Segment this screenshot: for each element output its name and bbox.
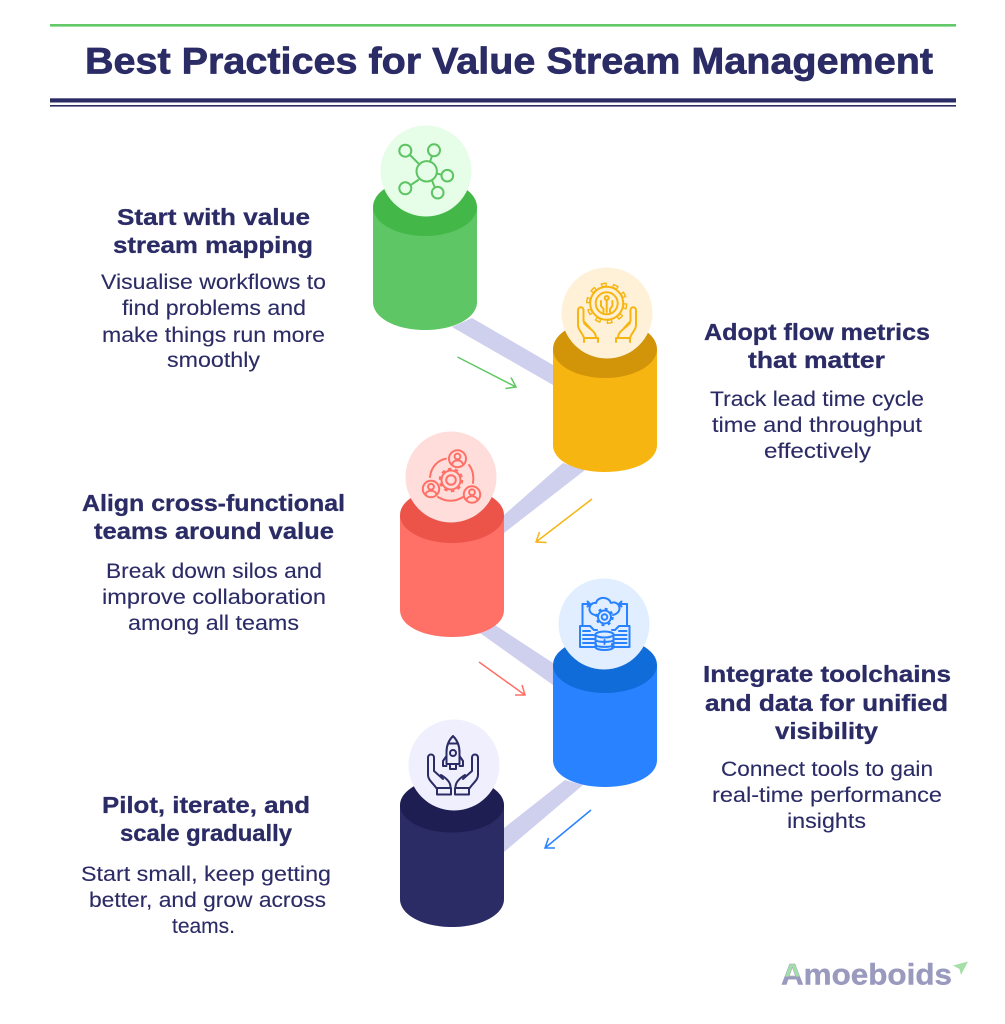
heading: integrate toolchains: Integrate toolchains: [703, 661, 951, 687]
heading: pilot iterate scale: scale gradually: [120, 820, 292, 846]
arrow: green: [458, 357, 516, 388]
heading: align cross-functional teams: [82, 490, 345, 544]
icon: cloud toolchain and data: [558, 578, 650, 670]
text block: integrate toolchains: [703, 661, 951, 833]
cylinder 5: navy: [400, 720, 504, 927]
text block: align cross-functional teams: [82, 490, 345, 635]
description: start with value stream mapping: make things run more: [102, 323, 325, 347]
heading: start with value stream mapping: Start with value: [117, 204, 310, 230]
description: start with value stream mapping: smoothly: [167, 348, 260, 372]
icon: team around gear: [406, 432, 496, 522]
description: integrate toolchains: real-time performance: [712, 783, 942, 807]
heading: align cross-functional teams: teams around value: [94, 518, 334, 544]
cylinder 1: green: [373, 126, 477, 330]
text block: adopt flow metrics: [704, 319, 930, 463]
connector: green to yellow: [452, 318, 553, 385]
arrow: blue: [545, 810, 591, 848]
icon: hands holding rocket: [408, 720, 500, 810]
heading: adopt flow metrics: that matter: [748, 347, 885, 373]
connector: yellow to red: [504, 463, 585, 533]
heading: integrate toolchains: visibility: [775, 718, 878, 744]
heading: integrate toolchains: and data for unified: [705, 690, 948, 716]
logo: Amoeboids: Amoeboids: [781, 958, 952, 992]
description: align cross-functional teams: Break down silos and: [106, 559, 322, 583]
description: integrate toolchains: insights: [787, 809, 866, 833]
heading: start with value stream mapping: [113, 204, 313, 258]
heading: align cross-functional teams: Align cross-functional: [82, 490, 345, 516]
description: integrate toolchains: [712, 757, 942, 833]
heading: start with value stream mapping: stream mapping: [113, 232, 313, 258]
description: pilot iterate scale: Start small, keep getting: [81, 862, 331, 886]
description: adopt flow metrics: [710, 387, 924, 463]
cylinder 4: blue: [553, 578, 657, 787]
description: align cross-functional teams: [102, 559, 326, 635]
description: pilot iterate scale: teams.: [172, 914, 235, 938]
description: start with value stream mapping: Visualise workflows to: [101, 270, 326, 294]
connector: red to blue: [480, 625, 553, 685]
icon: logo arrow: [953, 962, 968, 975]
heading: adopt flow metrics: Adopt flow metrics: [704, 319, 930, 345]
cylinder 2: yellow: [553, 268, 657, 472]
heading: adopt flow metrics: [704, 319, 930, 373]
description: start with value stream mapping: [101, 270, 326, 372]
arrow: red: [479, 662, 525, 695]
heading: pilot iterate scale: Pilot, iterate, and: [102, 792, 310, 818]
description: adopt flow metrics: Track lead time cycle: [710, 387, 924, 411]
icon: network map: [380, 126, 472, 216]
text block: pilot iterate scale: [81, 792, 331, 938]
title: Best Practices for Value Stream Management: [85, 40, 933, 82]
description: align cross-functional teams: among all teams: [128, 611, 299, 635]
heading: pilot iterate scale: [102, 792, 310, 846]
description: integrate toolchains: Connect tools to gain: [721, 757, 933, 781]
description: adopt flow metrics: effectively: [764, 439, 871, 463]
text block: start with value stream mapping: [101, 204, 326, 372]
cylinder 3: red: [400, 432, 504, 637]
description: align cross-functional teams: improve collaboration: [102, 585, 326, 609]
description: pilot iterate scale: [81, 862, 331, 938]
heading: integrate toolchains: [703, 661, 951, 744]
connector: blue to navy: [504, 780, 583, 852]
title double underline: [50, 98, 956, 107]
description: pilot iterate scale: better, and grow across: [89, 888, 326, 912]
description: start with value stream mapping: find problems and: [122, 296, 306, 320]
description: adopt flow metrics: time and throughput: [712, 413, 922, 437]
top green rule: [50, 24, 956, 27]
arrow: yellow: [536, 499, 592, 542]
icon: hands holding gear: [562, 268, 652, 358]
